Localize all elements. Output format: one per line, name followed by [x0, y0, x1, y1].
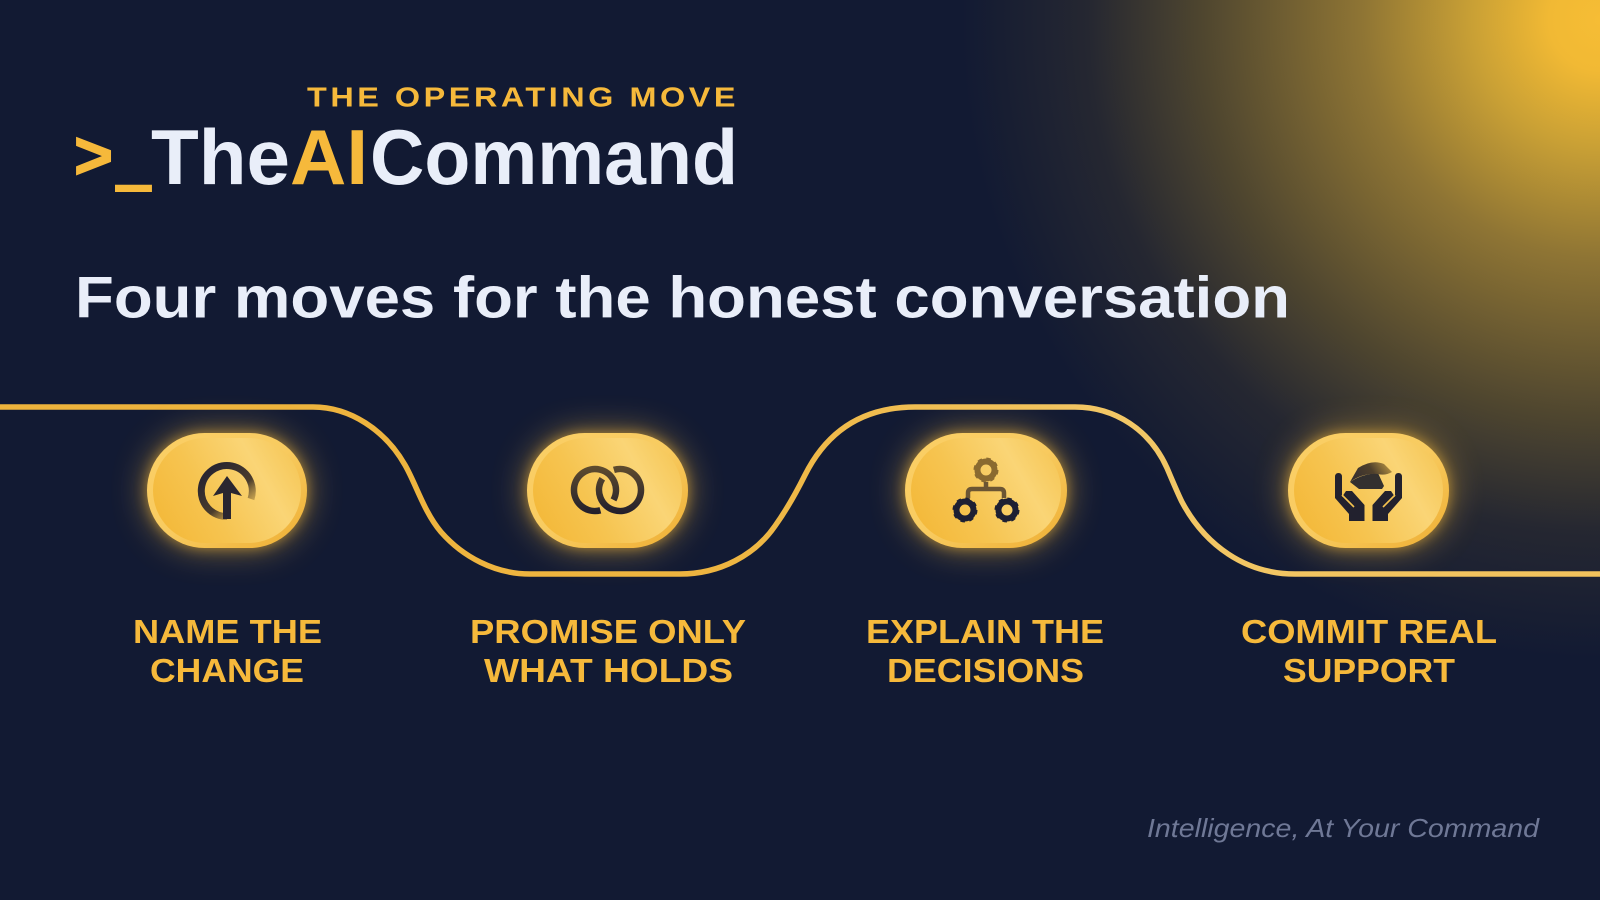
- logo wordmark: Command: [370, 113, 738, 201]
- icon: gear hierarchy: [954, 459, 1018, 521]
- label: COMMIT REAL: [1241, 613, 1497, 650]
- pill glow: [527, 433, 688, 548]
- icon: circled up arrow: [201, 466, 252, 519]
- step 3: explain the decisions: [866, 433, 1104, 689]
- step 1: name the change: [133, 433, 322, 689]
- icon: hands holding stone: [1335, 462, 1402, 521]
- pill glow: [147, 433, 307, 548]
- pill glow: [1288, 433, 1449, 548]
- corner glow: [900, 0, 1600, 700]
- label: [1241, 613, 1497, 689]
- label: NAME THE: [133, 613, 322, 650]
- logo wordmark: [74, 104, 738, 201]
- pill: [905, 433, 1067, 548]
- pill: [527, 433, 688, 548]
- label: [470, 613, 746, 689]
- label: WHAT HOLDS: [484, 652, 733, 689]
- label: EXPLAIN THE: [866, 613, 1104, 650]
- main heading: Four moves for the honest conversation: [75, 266, 1290, 330]
- logo wordmark: AI: [290, 113, 368, 201]
- pill: [147, 433, 307, 548]
- label: CHANGE: [150, 652, 304, 689]
- logo wordmark: >: [74, 118, 113, 194]
- header: eyebrow and logo: [74, 82, 739, 201]
- logo wordmark: The: [151, 113, 290, 201]
- pill glow: [905, 433, 1067, 548]
- eyebrow: THE OPERATING MOVE: [307, 82, 739, 112]
- label: SUPPORT: [1283, 652, 1455, 689]
- tagline: Intelligence, At Your Command: [1147, 813, 1541, 843]
- label: [866, 613, 1104, 689]
- logo wordmark: _: [116, 104, 151, 198]
- label: PROMISE ONLY: [470, 613, 746, 650]
- label: [133, 613, 322, 689]
- pill: [1288, 433, 1449, 548]
- icon: interlocked rings: [574, 469, 641, 511]
- label: DECISIONS: [887, 652, 1084, 689]
- step 4: commit real support: [1241, 433, 1497, 689]
- wave connector line: [0, 407, 1600, 574]
- step 2: promise only what holds: [470, 433, 746, 689]
